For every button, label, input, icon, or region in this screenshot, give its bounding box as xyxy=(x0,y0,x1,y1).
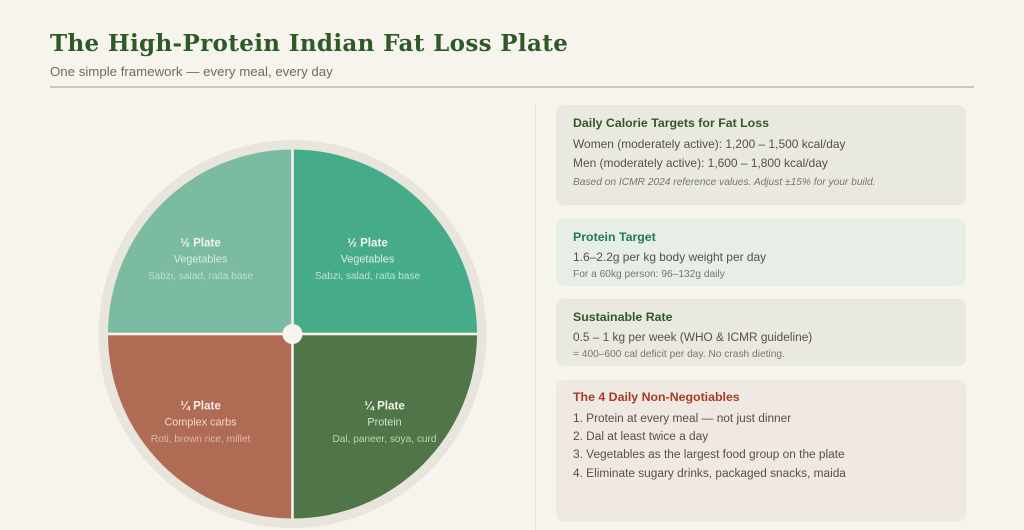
label: protein: Protein xyxy=(367,416,402,428)
label: vegetables right: ½ Plate xyxy=(347,236,388,250)
item 1: 1. Protein at every meal — not just dinner xyxy=(573,411,791,425)
panel heading: Protein Target xyxy=(573,230,656,244)
item 3: 3. Vegetables as the largest food group on the plate xyxy=(573,447,845,461)
quadrant: complex carbs xyxy=(108,334,292,518)
label: vegetables left: Sabzi, salad, raita base xyxy=(148,271,253,282)
panel: daily non-negotiables xyxy=(556,380,966,522)
plate rim xyxy=(98,140,486,528)
rate note: = 400–600 cal deficit per day. No crash dieting. xyxy=(573,349,785,360)
header rule xyxy=(50,86,974,88)
label: complex carbs: ¼ Plate xyxy=(180,400,221,412)
panel: protein target xyxy=(556,219,966,286)
label: vegetables right xyxy=(315,236,420,282)
label: protein: Dal, paneer, soya, curd xyxy=(332,434,437,445)
panel heading: Sustainable Rate xyxy=(573,310,672,324)
plate divider: horizontal xyxy=(108,333,477,335)
item 2: 2. Dal at least twice a day xyxy=(573,429,708,443)
reference note: Based on ICMR 2024 reference values. Adjust ±15% for your build. xyxy=(573,177,876,188)
label: vegetables left: ½ Plate xyxy=(180,236,221,250)
label: protein xyxy=(332,400,437,445)
protein example: For a 60kg person: 96–132g daily xyxy=(573,269,725,280)
subtitle: One simple framework — every meal, every day xyxy=(50,64,333,78)
panel: sustainable rate xyxy=(556,299,966,366)
chart: plate diagram xyxy=(98,140,486,528)
label: vegetables right: Vegetables xyxy=(341,254,395,266)
label: vegetables left: Vegetables xyxy=(174,254,228,266)
label: complex carbs: Roti, brown rice, millet xyxy=(151,434,250,445)
quadrant: protein xyxy=(292,334,477,518)
label: complex carbs: Complex carbs xyxy=(164,416,237,428)
men target: Men (moderately active): 1,600 – 1,800 kcal/day xyxy=(573,156,828,170)
title: The High-Protein Indian Fat Loss Plate xyxy=(50,30,568,57)
panel: daily calorie targets xyxy=(556,105,966,205)
column divider xyxy=(535,104,536,530)
protein range: 1.6–2.2g per kg body weight per day xyxy=(573,250,766,264)
label: vegetables right: Sabzi, salad, raita base xyxy=(315,271,420,282)
women target: Women (moderately active): 1,200 – 1,500 kcal/day xyxy=(573,137,846,151)
label: complex carbs xyxy=(151,400,250,445)
label: protein: ¼ Plate xyxy=(364,400,405,412)
label: vegetables left xyxy=(148,236,253,282)
quadrant: vegetables left xyxy=(108,150,292,334)
plate centre xyxy=(282,324,302,344)
quadrant: vegetables right xyxy=(292,150,477,334)
header xyxy=(50,30,974,88)
panel heading: The 4 Daily Non-Negotiables xyxy=(573,390,740,404)
panel heading: Daily Calorie Targets for Fat Loss xyxy=(573,116,769,130)
rate range: 0.5 – 1 kg per week (WHO & ICMR guideline) xyxy=(573,330,812,344)
item 4: 4. Eliminate sugary drinks, packaged snacks, maida xyxy=(573,466,846,480)
plate divider: vertical xyxy=(291,150,294,518)
